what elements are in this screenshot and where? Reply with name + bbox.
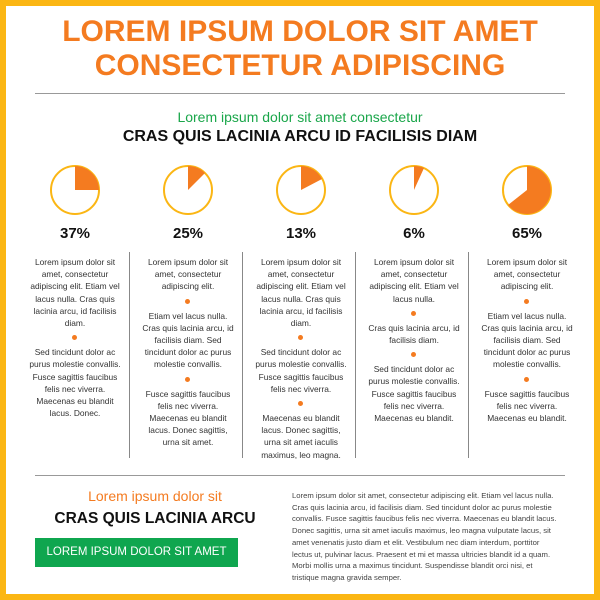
column 2: urna sit amet. (163, 437, 213, 447)
button (35, 538, 238, 567)
column 1: Maecenas eu blandit (36, 396, 114, 406)
pie 2 (164, 166, 212, 214)
column 3: purus molestie convallis. (255, 359, 347, 369)
column 2: Lorem ipsum dolor sit (148, 257, 228, 267)
column 5: tincidunt dolor ac purus (484, 347, 570, 357)
column 1: Lorem ipsum dolor sit (35, 257, 115, 267)
column 3: lacinia arcu, id facilisis (260, 306, 342, 316)
column 1: diam. Sed tincidunt dolor ac (35, 318, 115, 357)
heading: CRAS QUIS LACINIA ARCU ID FACILISIS DIAM (123, 128, 477, 145)
column 2: lacus. Donec sagittis, (148, 425, 228, 435)
column 1: purus molestie convallis. (29, 359, 121, 369)
column 2: amet, consectetur (155, 269, 221, 279)
column 5: facilisis diam. Sed (493, 335, 561, 345)
column 4 (368, 257, 460, 423)
pie 1 (51, 166, 99, 214)
column 2: adipiscing elit. Etiam vel lacus nulla. (149, 281, 227, 321)
column 1: lacus nulla. Cras quis (35, 294, 115, 304)
percentages: 13% (286, 225, 316, 242)
pie 4 (390, 166, 438, 214)
column 5: adipiscing elit. Etiam vel lacus nulla. (488, 281, 566, 321)
column 1: lacinia arcu, id facilisis (34, 306, 116, 316)
column 3: lacus nulla. Cras quis (261, 294, 341, 304)
column 2: molestie convallis. Fusce sagittis faucibus (146, 359, 230, 399)
column 1: amet, consectetur (42, 269, 108, 279)
column 2: felis nec viverra. (158, 401, 218, 411)
column 4: Fusce sagittis faucibus (372, 389, 456, 399)
column 4: purus molestie convallis. (368, 376, 460, 386)
bottom heading: CRAS QUIS LACINIA ARCU (54, 510, 256, 527)
title (62, 15, 538, 82)
column 1: felis nec viverra. (45, 384, 105, 394)
column 1 (29, 257, 121, 418)
bottom paragraph: amet venenatis justo diam et elit. Vestibulum nec diam interdum, porttitor (292, 538, 539, 547)
column 3: lacus. Donec sagittis, (261, 425, 341, 435)
column 3: Fusce sagittis faucibus (259, 372, 343, 382)
column 4: Lorem ipsum dolor sit (374, 257, 454, 267)
column 2: Maecenas eu blandit (149, 413, 227, 423)
column 4: adipiscing elit. Etiam vel (369, 281, 459, 291)
bottom paragraph: tristique magna gravida semper. (292, 573, 401, 582)
subtitle: Lorem ipsum dolor sit amet consectetur (177, 109, 423, 125)
column 2: Cras quis lacinia arcu, id (142, 323, 234, 333)
column 4: lacus nulla. Cras quis lacinia arcu, id (368, 294, 460, 333)
column 1: adipiscing elit. Etiam vel (30, 281, 120, 291)
column 5 (481, 257, 573, 423)
column 1: Fusce sagittis faucibus (33, 372, 117, 382)
title: LOREM IPSUM DOLOR SIT AMET (62, 15, 538, 48)
bottom paragraph: Lorem ipsum dolor sit amet, consectetur adipiscing elit. Etiam vel lacus nulla. (292, 491, 554, 500)
pie charts (50, 165, 552, 215)
column 3: urna sit amet iaculis (264, 437, 338, 447)
percentages (60, 225, 542, 242)
title: CONSECTETUR ADIPISCING (95, 49, 505, 82)
bottom paragraph: Morbi mollis urna a maximus tincidunt. Suspendisse blandit orci nisi, et (292, 561, 533, 570)
column 2 (142, 257, 234, 447)
column 3: Lorem ipsum dolor sit (261, 257, 341, 267)
bottom paragraph: convallis. Fusce sagittis faucibus felis nec viverra. Maecenas eu blandit lacus. (292, 514, 556, 523)
pie 3 (277, 166, 325, 214)
bottom paragraph (292, 491, 556, 582)
percentages: 37% (60, 225, 90, 242)
pie 5 (503, 166, 551, 214)
bottom orange subtitle: Lorem ipsum dolor sit (88, 488, 222, 504)
column 3: amet, consectetur (268, 269, 334, 279)
percentages: 6% (403, 225, 425, 242)
column 5: Cras quis lacinia arcu, id (481, 323, 573, 333)
column 3: maximus, leo magna. (261, 450, 341, 460)
bottom paragraph: Cras quis lacinia arcu, id facilisis diam. Sed tincidunt dolor ac purus molestie (292, 503, 552, 512)
bottom paragraph: lectus ut, pulvinar lacus. Praesent et mi et massa ultricies blandit id a quam. (292, 550, 550, 559)
column 3: adipiscing elit. Etiam vel (256, 281, 346, 291)
percentages: 25% (173, 225, 203, 242)
column 1: lacus. Donec. (50, 408, 100, 418)
column 5: molestie convallis. Fusce sagittis faucibus (485, 359, 569, 399)
percentages: 65% (512, 225, 542, 242)
column 2: facilisis diam. Sed (154, 335, 222, 345)
column 5: Maecenas eu blandit. (487, 413, 567, 423)
column 5: Lorem ipsum dolor sit (487, 257, 567, 267)
column 2: tincidunt dolor ac purus (145, 347, 231, 357)
column 4: Maecenas eu blandit. (374, 413, 454, 423)
column 4: felis nec viverra. (384, 401, 444, 411)
button: LOREM IPSUM DOLOR SIT AMET (46, 546, 226, 558)
column 5: amet, consectetur (494, 269, 560, 279)
bottom paragraph: Donec sagittis, urna sit amet iaculis maximus, leo magna vulputate lacus, sit (292, 526, 551, 535)
column 4: facilisis diam. Sed tincidunt dolor ac (374, 335, 454, 374)
column 3: felis nec viverra. Maecenas eu blandit (262, 384, 340, 423)
column 3 (255, 257, 347, 460)
column 4: amet, consectetur (381, 269, 447, 279)
column 5: felis nec viverra. (497, 401, 557, 411)
column 3: diam. Sed tincidunt dolor ac (261, 318, 341, 357)
